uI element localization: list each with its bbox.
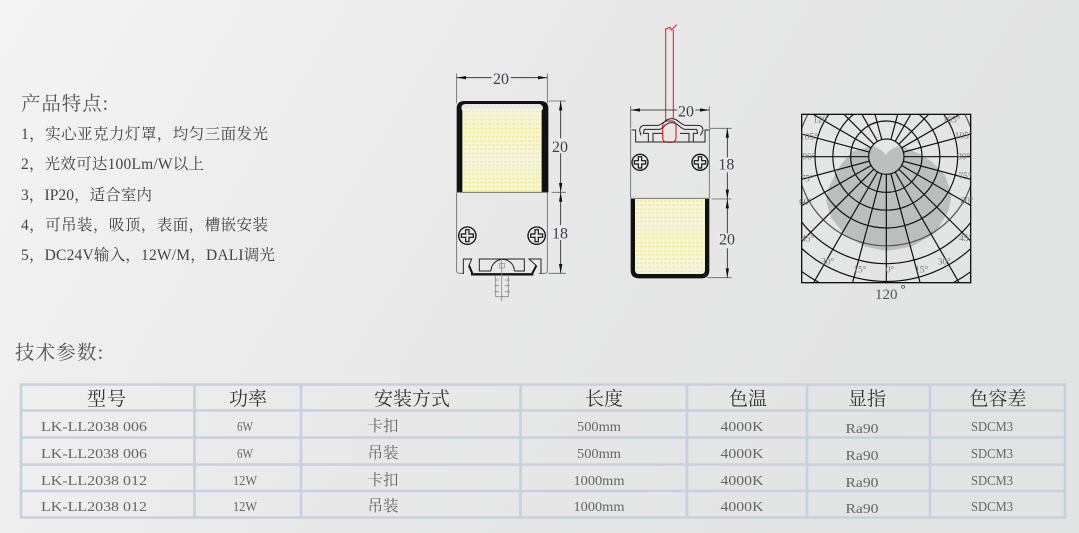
angle labels: 75° [800, 174, 814, 185]
table row 1: 500mm [577, 420, 621, 435]
table row 1: 卡扣 [367, 417, 399, 435]
table row 2: SDCM3 [971, 447, 1013, 462]
table row 1: SDCM3 [971, 420, 1013, 435]
table row 4: 4000K [720, 500, 764, 515]
table row 1: LK-LL2038 006 [41, 420, 147, 435]
screw right [528, 227, 545, 244]
top width dimension [631, 103, 709, 128]
feature 5: 5，DC24V输入，12W/M，DALI调光 [21, 246, 275, 264]
section: product features [21, 93, 275, 264]
angle labels: 90° [957, 151, 970, 162]
light distribution shading [826, 147, 952, 251]
table row 3: 卡扣 [367, 471, 399, 489]
inner circle with heart-shaped core [868, 138, 904, 175]
table row 2: LK-LL2038 006 [41, 447, 147, 462]
table header row: 色温 [729, 388, 767, 410]
table row 3 [41, 471, 1013, 491]
right dimensions [548, 101, 568, 273]
table row 1: 4000K [720, 420, 764, 435]
housing outline [631, 129, 709, 198]
table grid [21, 384, 1065, 518]
table header row: 功率 [229, 388, 267, 410]
table row 4 [41, 497, 1013, 517]
table row 2 [41, 444, 1013, 464]
diffuser with LED fill [457, 101, 548, 192]
table header row: 显指 [848, 388, 886, 410]
housing outline [457, 192, 547, 273]
drawing: suspended cross-section [631, 25, 735, 278]
angle labels: 30° [821, 256, 834, 267]
table row 1: Ra90 [846, 422, 878, 437]
feature 3: 3，IP20，适合室内 [21, 186, 152, 204]
angle labels: 60° [960, 196, 974, 207]
heading: product features: 产品特点: [21, 93, 108, 115]
table header row: 安装方式 [374, 388, 450, 410]
table row 3: 1000mm [574, 474, 625, 489]
table row 2: 6W [237, 447, 254, 462]
angle labels: 105° [943, 114, 961, 125]
table row 4: 12W [233, 500, 258, 515]
angle labels: 15° [915, 265, 928, 276]
table row 2: 4000K [720, 447, 764, 462]
feature 2: 2，光效可达100Lm/W以上 [21, 155, 204, 173]
angle labels: 30° [938, 256, 951, 267]
chart: polar light distribution [800, 114, 973, 284]
angle labels: 60° [799, 197, 812, 208]
feature 4: 4，可吊装，吸顶，表面，槽嵌安装 [21, 215, 268, 234]
polar grid [802, 115, 970, 282]
angle labels: 105° [800, 131, 818, 142]
table row 3: 12W [233, 474, 258, 489]
angle labels: 120 [813, 115, 827, 125]
angle labels: 105° [955, 130, 973, 141]
table row 2: 500mm [577, 447, 621, 462]
rail and mounting screw [463, 259, 541, 301]
table row 2: Ra90 [846, 449, 878, 464]
angle labels: 45° [959, 233, 972, 244]
angle labels: 75° [958, 171, 972, 182]
right dimensions: 20 [719, 231, 735, 248]
table row 4: 吊装 [367, 497, 399, 515]
table row 4: 1000mm [574, 500, 625, 515]
table row 4: SDCM3 [971, 500, 1013, 515]
table row 3: Ra90 [846, 476, 878, 491]
table row 3: LK-LL2038 012 [41, 474, 147, 489]
chart caption: beam angle: 120 [875, 287, 898, 303]
angle labels: 0° [886, 265, 894, 276]
angle labels: 15° [853, 265, 867, 276]
screw right [692, 154, 708, 170]
table row 1: 6W [237, 420, 254, 435]
table header row [87, 388, 1027, 410]
table row 2: 吊装 [367, 444, 399, 462]
table header row: 色容差 [969, 388, 1027, 410]
table header row: 型号 [87, 388, 127, 410]
right dimensions: 18 [552, 226, 568, 243]
diffuser with LED fill [631, 199, 709, 278]
screw left [459, 227, 476, 244]
right dimensions: 18 [718, 156, 734, 173]
heading: technical parameters: 技术参数: [15, 342, 103, 364]
table row 1 [41, 417, 1013, 437]
top width dimension [457, 71, 547, 103]
right dimensions [707, 128, 735, 278]
drawing: surface mount cross-section [457, 71, 568, 273]
table row 3: 4000K [720, 474, 764, 489]
suspension cable in red [663, 25, 677, 142]
chart caption: beam angle: ° [900, 281, 906, 296]
feature 1: 1，实心亚克力灯罩，均匀三面发光 [21, 125, 268, 143]
mounting rail [632, 119, 710, 142]
right dimensions: 20 [552, 139, 568, 156]
top width dimension: 20 [678, 103, 694, 120]
angle labels: 90° [802, 151, 816, 162]
table row 3: SDCM3 [971, 474, 1013, 489]
angle labels: 45° [801, 234, 814, 245]
table row 4: Ra90 [846, 502, 878, 517]
screw left [632, 154, 648, 170]
table: technical parameters [21, 384, 1065, 518]
frame [802, 114, 971, 283]
angle labels [799, 114, 974, 276]
table header row: 长度 [585, 388, 623, 410]
table row 4: LK-LL2038 012 [41, 500, 147, 515]
top width dimension: 20 [493, 71, 509, 88]
